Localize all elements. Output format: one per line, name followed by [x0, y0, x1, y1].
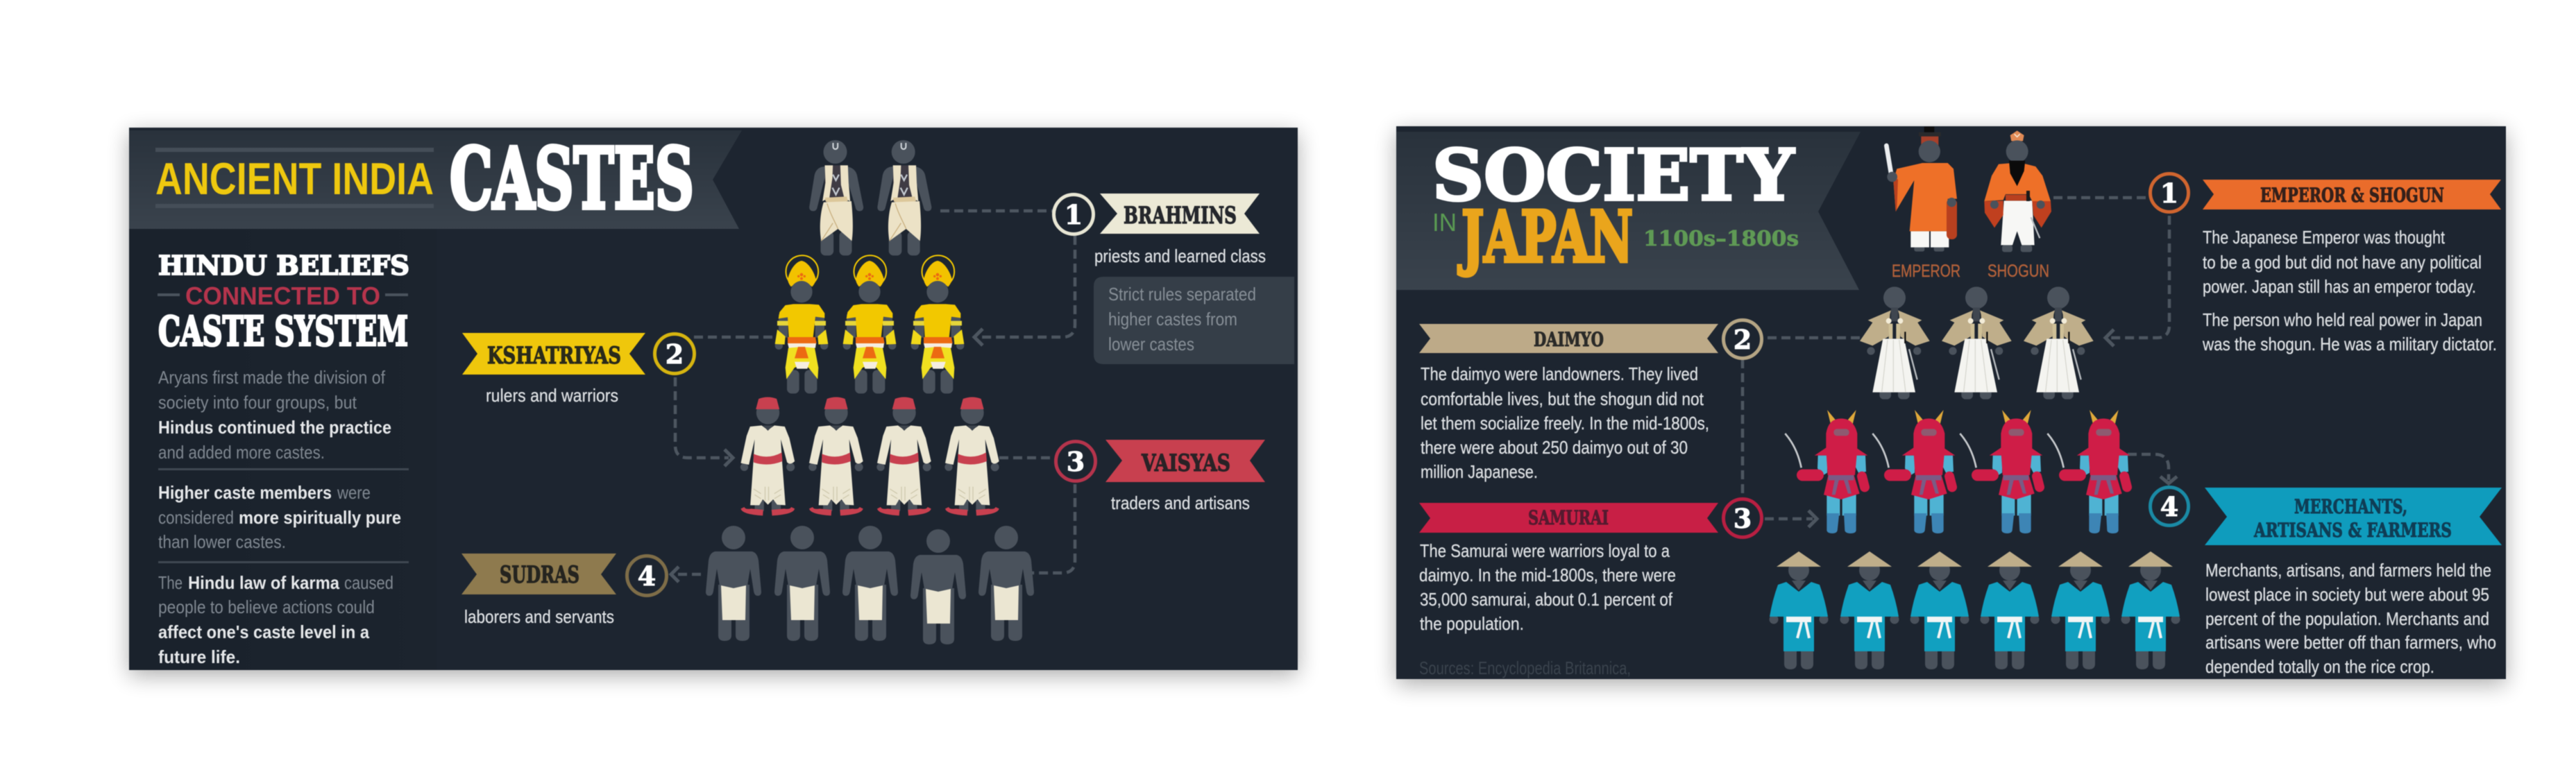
text block: law of karma: affect one's caste level in a — [158, 621, 369, 642]
arrow: kshatriyas to vaisyas — [675, 377, 733, 466]
callout: strict rules — [1094, 277, 1294, 364]
text block: merchants — [2205, 560, 2496, 677]
arrow: emperor connector — [2053, 196, 2149, 199]
figures: merchants, artisans and farmers — [1770, 551, 2180, 669]
label: kshatriyas: KSHATRIYAS — [487, 342, 621, 370]
arrow: kshatriyas connector — [694, 336, 776, 338]
label: emperor and shogun: EMPEROR & SHOGUN — [2260, 184, 2444, 207]
text block: merchants: Merchants, artisans, and farmers held the — [2205, 560, 2491, 581]
text block: law of karma: future life. — [158, 646, 240, 667]
label: daimyo — [1419, 320, 1761, 358]
title: society in japan: JAPAN — [1458, 196, 1633, 278]
text block: higher caste members: Higher caste members — [158, 482, 332, 503]
figures: brahmins — [809, 140, 931, 255]
label: sudras: 4 — [638, 560, 656, 592]
figures: samurai — [1785, 410, 2130, 533]
text block: law of karma: people to believe actions could — [158, 597, 375, 617]
text block: merchants: percent of the population. Merchants and — [2205, 608, 2489, 629]
title: society in japan: SOCIETY — [1432, 134, 1795, 216]
text block: emperor and shogun: to be a god but did not have any political — [2203, 252, 2482, 273]
text block: daimyo: The daimyo were landowners. They lived — [1421, 363, 1698, 384]
arrow: daimyo to samurai — [1741, 359, 1744, 499]
sources: Sources: Encyclopedia Britannica, — [1419, 658, 1631, 678]
arrow: emperor to daimyo — [2105, 216, 2169, 346]
panel: ancient india castes — [129, 128, 1298, 676]
callout: strict rules: lower castes — [1108, 334, 1194, 354]
text block: aryans: Aryans first made the division of — [158, 367, 386, 388]
text block: merchants: depended totally on the rice crop. — [2205, 656, 2434, 677]
text block: emperor and shogun: The Japanese Emperor was thought — [2203, 227, 2446, 248]
text block: merchants: lowest place in society but were about 95 — [2205, 584, 2489, 605]
heading: hindu beliefs connected to caste system: CONNECTED TO — [185, 282, 380, 310]
label: sudras: SUDRAS — [500, 561, 579, 589]
text block: daimyo — [1421, 363, 1709, 482]
text block: higher caste members: than lower castes. — [158, 531, 286, 552]
label: samurai — [1419, 499, 1761, 537]
arrow: vaisyas to sudras — [1031, 484, 1075, 573]
label: merchants, artisans and farmers: MERCHANTS, — [2294, 495, 2407, 518]
label: samurai: 3 — [1734, 503, 1752, 534]
label: vaisyas: traders and artisans — [1111, 492, 1250, 513]
label: vaisyas: 3 — [1067, 446, 1085, 477]
title: society in japan — [1432, 134, 1799, 278]
text block: aryans: society into four groups, but — [158, 392, 357, 413]
title: castes: CASTES — [450, 129, 694, 228]
text block: higher caste members — [158, 482, 401, 552]
arrow: samurai connector — [1765, 511, 1817, 527]
text block: samurai: 35,000 samurai, about 0.1 percent of — [1420, 589, 1673, 610]
text block: emperor and shogun — [2202, 227, 2497, 354]
figures: daimyo — [1860, 286, 2094, 400]
heading: ancient india: ANCIENT INDIA — [155, 153, 434, 204]
arrow: brahmins to kshatriyas — [974, 236, 1075, 345]
callout: strict rules: Strict rules separated — [1108, 284, 1256, 304]
label: brahmins — [1053, 194, 1266, 266]
text block: emperor and shogun: was the shogun. He was a military dictator. — [2202, 334, 2497, 354]
header banner: japan — [1396, 132, 1861, 290]
label: brahmins: priests and learned class — [1094, 246, 1266, 266]
label: sudras: laborers and servants — [464, 606, 614, 627]
callout: strict rules: higher castes from — [1108, 309, 1237, 329]
labels: emperor and shogun: SHOGUN — [1988, 261, 2049, 281]
text block: daimyo: million Japanese. — [1421, 461, 1538, 482]
arrow: brahmins connector — [940, 209, 1053, 212]
text block: law of karma: Hindu law of karma — [188, 572, 339, 593]
label: brahmins: BRAHMINS — [1124, 202, 1237, 230]
label: vaisyas: VAISYAS — [1141, 449, 1230, 477]
label: daimyo: 2 — [1734, 324, 1752, 355]
arrow: vaisyas connector — [999, 456, 1055, 459]
text block: aryans — [158, 367, 391, 463]
arrow: sudras to label — [671, 567, 701, 582]
label: merchants, artisans and farmers — [2150, 487, 2502, 545]
figure: emperor — [1886, 127, 1957, 252]
heading: hindu beliefs connected to caste system — [158, 250, 409, 355]
text block: aryans: Hindus continued the practice — [158, 417, 391, 438]
figures: kshatriyas — [775, 255, 964, 393]
text block: law of karma: The — [158, 572, 183, 593]
figures: sudras — [706, 526, 1034, 644]
label: emperor and shogun: 1 — [2160, 178, 2178, 209]
heading: hindu beliefs connected to caste system: CASTE SYSTEM — [158, 307, 408, 355]
heading: hindu beliefs connected to caste system: HINDU BELIEFS — [158, 250, 409, 281]
text block: emperor and shogun: The person who held real power in Japan — [2203, 309, 2482, 330]
label: merchants, artisans and farmers: ARTISANS & FARMERS — [2253, 519, 2452, 542]
text block: samurai: The Samurai were warriors loyal to a — [1420, 540, 1670, 561]
text block: law of karma: caused — [344, 572, 393, 593]
header banner: india — [129, 130, 742, 229]
panel: society in japan — [1396, 126, 2506, 685]
label: brahmins: 1 — [1065, 199, 1083, 230]
text block: daimyo: there were about 250 daimyo out of 30 — [1421, 437, 1688, 458]
text block: merchants: artisans were better off than farmers, who — [2205, 632, 2496, 653]
label: emperor and shogun — [2150, 173, 2501, 212]
text block: samurai: the population. — [1420, 613, 1524, 634]
title: society in japan: IN — [1432, 208, 1457, 237]
label: kshatriyas: rulers and warriors — [486, 385, 618, 406]
figure: shogun — [1984, 130, 2051, 252]
arrow: samurai to merchants — [2128, 454, 2177, 483]
text block: samurai — [1419, 540, 1676, 634]
text block: samurai: daimyo. In the mid-1800s, there were — [1419, 565, 1676, 585]
text block: higher caste members: were — [337, 482, 371, 503]
text block: emperor and shogun: power. Japan still has an emperor today. — [2203, 276, 2476, 297]
text block: aryans: and added more castes. — [158, 442, 325, 463]
text block: daimyo: let them socialize freely. In the mid-1800s, — [1421, 413, 1709, 434]
text block: daimyo: comfortable lives, but the shogun did not — [1421, 388, 1704, 409]
label: kshatriyas — [462, 333, 694, 406]
text block: higher caste members: more spiritually pure — [239, 507, 401, 528]
label: samurai: SAMURAI — [1528, 506, 1609, 529]
text block: law of karma — [158, 572, 393, 667]
label: kshatriyas: 2 — [666, 338, 684, 370]
labels: emperor and shogun: EMPEROR — [1892, 261, 1960, 281]
label: daimyo: DAIMYO — [1534, 328, 1604, 351]
label: vaisyas — [1056, 440, 1265, 513]
title: society in japan: 1100s–1800s — [1643, 227, 1799, 251]
label: sudras — [461, 554, 666, 627]
text block: higher caste members: considered — [158, 507, 234, 528]
arrow: daimyo connector — [1768, 336, 1861, 339]
labels: emperor and shogun — [1892, 261, 2049, 281]
figures: vaisyas — [740, 397, 999, 515]
label: merchants, artisans and farmers: 4 — [2160, 491, 2178, 522]
